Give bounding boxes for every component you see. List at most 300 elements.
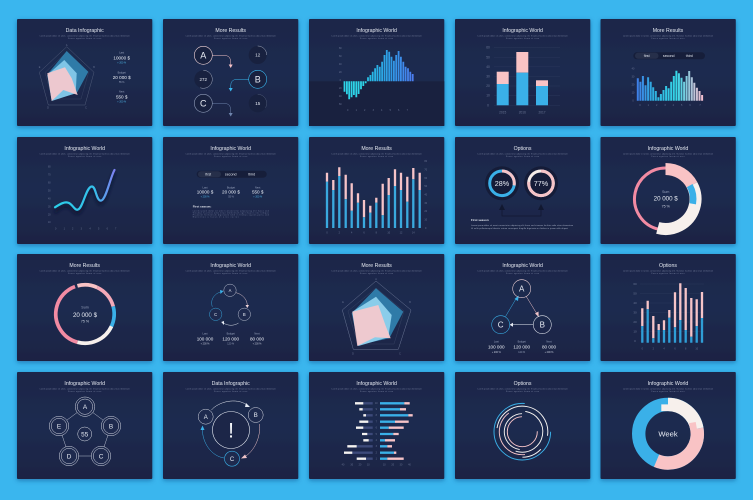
left dark bars	[352, 403, 373, 459]
x axis: 14	[412, 232, 415, 234]
x axis: 4	[89, 228, 91, 230]
description: Lorem ipsum dolor sit amet, consectetur adipiscing elit. Vivamus facilisis odio vitae elementum	[332, 34, 422, 38]
panel: tabs with stats	[163, 137, 298, 244]
card	[455, 19, 590, 126]
description: Fusce egestas lorem ut arcu	[214, 272, 247, 275]
card	[17, 19, 152, 126]
x axis	[642, 348, 699, 350]
y axis: 0	[632, 100, 634, 102]
y axis: 0	[487, 103, 489, 107]
x axis: 2	[72, 228, 74, 230]
stats	[113, 50, 131, 104]
first season text	[193, 205, 269, 218]
heading: Infographic World	[210, 146, 251, 152]
triangle diagram: C	[498, 321, 504, 330]
y axis: 40	[424, 194, 428, 196]
description: Lorem ipsum dolor sit amet, consectetur adipiscing elit. Vivamus facilisis odio vitae elementum	[623, 388, 714, 390]
description: Fusce egestas lorem ut arcu	[360, 390, 393, 393]
ring centre text: 20 000 $	[73, 312, 98, 319]
x axis: 6	[398, 109, 400, 112]
y axis: 20	[48, 214, 51, 216]
description: Fusce egestas lorem ut arcu	[214, 155, 247, 158]
y axis: 20	[424, 210, 428, 213]
card	[163, 254, 298, 361]
description: Fusce egestas lorem ut arcu	[652, 390, 685, 393]
first season text: Lorem ipsum dolor sit amet consectetur adipiscing elit fusce sed	[193, 210, 269, 212]
x axis: 30	[400, 463, 403, 466]
stats: 120 %	[227, 342, 235, 346]
y axis: 30	[48, 206, 51, 208]
description	[478, 34, 568, 40]
panel: butterfly bars	[309, 372, 444, 479]
y axis: 20	[339, 71, 342, 74]
description: Lorem ipsum dolor sit amet, consectetur adipiscing elit. Vivamus facilisis odio vitae elementum	[40, 34, 130, 38]
row labels: 4	[376, 439, 378, 442]
card	[163, 372, 298, 479]
x axis: 1	[64, 228, 66, 230]
x axis: 5	[98, 228, 100, 230]
stats: Budget	[227, 332, 235, 336]
description: Fusce egestas lorem ut arcu	[68, 155, 101, 158]
heading: More Results	[653, 28, 684, 34]
card	[600, 137, 736, 244]
x axis: 2	[653, 348, 655, 350]
x axis: 3	[373, 109, 375, 112]
row labels: 8	[376, 414, 378, 417]
heading: Options	[514, 381, 532, 387]
x axis: 4	[673, 104, 675, 107]
ring centre text	[73, 306, 98, 324]
x axis: 10	[367, 463, 370, 466]
x axis: 3	[664, 104, 666, 107]
left white bars	[344, 403, 369, 459]
panel: radar data infographic	[17, 19, 152, 126]
y axis	[48, 166, 51, 224]
y axis: 80	[424, 160, 428, 163]
description: Lorem ipsum dolor sit amet, consectetur adipiscing elit. Vivamus facilisis odio vitae elementum	[478, 152, 568, 156]
y axis	[633, 282, 637, 343]
node A with arrow: A	[200, 51, 206, 61]
stats: 120 %	[518, 351, 526, 354]
stats: Budget	[118, 70, 126, 74]
cycle diagram: B	[254, 413, 258, 419]
description: Lorem ipsum dolor sit amet, consectetur adipiscing elit. Vivamus facilisis odio vitae elementum	[186, 34, 276, 38]
ring centre text: 20 000 $	[654, 196, 678, 203]
y axis: 10	[424, 219, 428, 222]
x axis: 2016	[519, 110, 526, 114]
y axis: 60	[339, 55, 342, 58]
y axis: 20	[633, 320, 637, 324]
description	[332, 152, 422, 158]
x axis: 2017	[538, 110, 546, 114]
description: Fusce egestas lorem ut arcu	[652, 272, 685, 275]
stats: Last	[203, 332, 208, 336]
first season text: Maecenas a lacus et arcu varius	[193, 216, 239, 218]
ring centre text: 75 %	[662, 204, 671, 208]
node diagram: E	[57, 423, 61, 430]
heading: More Results	[361, 146, 392, 152]
x axis: 10	[695, 348, 699, 350]
x axis: 2	[656, 104, 658, 107]
description: Lorem ipsum dolor sit amet, consectetur adipiscing elit. Vivamus facilisis odio vitae elementum	[623, 34, 714, 38]
y axis: 50	[48, 190, 51, 192]
heading: Infographic World	[64, 381, 105, 387]
description: Fusce egestas lorem ut arcu	[652, 37, 685, 40]
node diagram	[49, 397, 121, 466]
node diagram: B	[109, 423, 113, 430]
panel: tabbed bars	[600, 19, 736, 126]
stats: + 200 %	[201, 342, 210, 346]
radar chart: C	[85, 106, 87, 110]
heading: Options	[659, 263, 677, 269]
tabs: second	[225, 173, 236, 177]
cycle diagram: B	[243, 312, 246, 317]
stats: Next	[255, 185, 261, 189]
panel: stacked column chart	[455, 19, 590, 126]
description	[40, 388, 130, 393]
concentric arcs	[486, 396, 558, 468]
description	[332, 270, 422, 275]
right pink bars	[385, 403, 413, 459]
lower dark band	[309, 81, 444, 126]
description: Fusce egestas lorem ut arcu	[214, 37, 247, 40]
heading: More Results	[361, 263, 392, 269]
node 15: 15	[255, 101, 261, 106]
x axis: 7	[115, 228, 117, 230]
x axis: 5	[681, 104, 683, 107]
tabs: third	[686, 54, 693, 58]
stats: 20 000 $	[222, 190, 240, 195]
line	[55, 170, 114, 210]
node B with arrow: B	[255, 75, 261, 85]
stats: + 200 %	[492, 351, 502, 354]
donut label: Week	[658, 430, 678, 439]
stats: 550 $	[252, 190, 264, 195]
row labels: 2	[376, 452, 378, 455]
cycle diagram: C	[230, 457, 235, 463]
description: Fusce egestas lorem ut arcu	[214, 390, 247, 393]
first season text: Vivamus facilisis odio vitae elementum eget mauris nec tempus	[193, 212, 269, 214]
first season text	[471, 218, 574, 230]
x axis	[639, 104, 701, 107]
stats: Next	[546, 340, 552, 344]
x axis: 0	[347, 109, 349, 112]
description	[186, 152, 276, 158]
panel: cycle of three	[163, 254, 298, 361]
cycle diagram: A	[204, 415, 208, 421]
card	[309, 137, 444, 244]
stats: + 200 %	[201, 196, 210, 198]
y axis: 10	[632, 92, 635, 94]
negative bars	[344, 81, 366, 99]
y axis	[424, 160, 428, 230]
y axis: 40	[633, 301, 637, 305]
stats: 120 000	[222, 336, 239, 341]
x axis: 30	[350, 463, 354, 466]
x axis: 5	[390, 109, 392, 112]
tabs	[197, 171, 267, 178]
description: Lorem ipsum dolor sit amet, consectetur adipiscing elit. Vivamus facilisis odio vitae elementum	[40, 388, 130, 390]
x axis	[326, 232, 415, 234]
stats	[197, 185, 264, 198]
stats: 55 %	[228, 196, 235, 198]
radar chart	[39, 44, 95, 110]
heading: Infographic World	[64, 146, 105, 152]
cycle diagram: C	[214, 312, 217, 317]
description: Fusce egestas lorem ut arcu	[652, 155, 685, 158]
blue bars	[327, 176, 420, 228]
x axis: 6	[689, 104, 691, 107]
bars	[638, 71, 702, 101]
panel: large radar	[309, 254, 444, 361]
x axis: 10	[387, 232, 391, 234]
y axis: 0	[634, 339, 636, 343]
node diagram: C	[99, 453, 104, 460]
x axis: 0	[326, 232, 328, 234]
row labels: 9	[376, 408, 378, 411]
triangle diagram	[492, 280, 551, 334]
donut chart	[634, 400, 702, 468]
blue bars	[642, 309, 702, 343]
heading: More Results	[69, 263, 100, 269]
pink bar tops	[327, 167, 420, 217]
line shadow	[55, 173, 114, 213]
x axis: 1	[356, 109, 358, 112]
stats: 120 000	[513, 344, 530, 350]
tabs	[633, 52, 705, 59]
radar chart: E	[39, 66, 41, 69]
stats: 20 000 $	[113, 75, 131, 80]
description	[623, 34, 714, 40]
x axis: 40	[408, 463, 411, 466]
description	[40, 34, 130, 40]
y axis: 60	[48, 182, 51, 184]
stats: Next	[254, 332, 260, 336]
description	[332, 388, 422, 393]
heading: Options	[514, 146, 532, 152]
x axis	[499, 110, 546, 114]
card	[455, 372, 590, 479]
tabs: second	[663, 54, 674, 58]
x axis: 1	[648, 104, 650, 107]
description: Lorem ipsum dolor sit amet, consectetur adipiscing elit. Vivamus facilisis odio vitae elementum	[623, 152, 714, 156]
description	[478, 388, 568, 393]
radar chart: D	[352, 352, 354, 356]
first season text: First season	[471, 218, 489, 222]
heading: Infographic World	[648, 146, 688, 152]
heading: Infographic World	[502, 28, 543, 34]
x axis	[55, 228, 117, 230]
card	[17, 137, 152, 244]
y axis: 20	[632, 84, 635, 86]
card	[163, 137, 298, 244]
ring centre text: Sum	[662, 190, 669, 194]
panel: percentage rings	[455, 137, 590, 244]
y axis: 60	[486, 46, 490, 50]
stats: 100 000	[488, 344, 505, 350]
description	[623, 270, 714, 275]
description: Lorem ipsum dolor sit amet, consectetur adipiscing elit. Vivamus facilisis odio vitae elementum	[186, 388, 276, 390]
node diagram: D	[67, 453, 72, 460]
x axis: 6	[674, 348, 676, 350]
y axis	[486, 46, 490, 107]
x axis: 2	[339, 232, 341, 234]
heading: Infographic World	[648, 381, 688, 387]
y axis: 30	[633, 310, 637, 314]
right blue bars	[380, 403, 408, 459]
y axis: 50	[633, 292, 637, 296]
y axis: 40	[48, 198, 51, 200]
x axis: 2015	[499, 110, 506, 114]
card	[455, 254, 590, 361]
y axis: 60	[424, 177, 428, 180]
panel: five nodes	[17, 372, 152, 479]
description: Lorem ipsum dolor sit amet, consectetur adipiscing elit. Vivamus facilisis odio vitae elementum	[478, 34, 568, 38]
radar chart: A	[66, 44, 68, 47]
description: Fusce egestas lorem ut arcu	[506, 272, 539, 275]
x axis: 7	[407, 109, 409, 112]
heading: Data Infographic	[212, 381, 250, 387]
y axis: 30	[424, 202, 428, 205]
heading: Infographic World	[210, 263, 251, 269]
triangle diagram: B	[540, 321, 545, 330]
tabs: third	[248, 173, 255, 177]
ring 77%: 77%	[534, 179, 549, 188]
stats: + 200 %	[253, 196, 263, 198]
row labels: 1	[376, 458, 378, 461]
y axis: 50	[424, 185, 428, 188]
description: Lorem ipsum dolor sit amet, consectetur adipiscing elit. Vivamus facilisis odio vitae elementum	[478, 270, 568, 272]
ring centre text	[654, 190, 678, 208]
heading: More Results	[215, 28, 246, 34]
card	[17, 254, 152, 361]
positive bars	[368, 50, 413, 81]
stats: Budget	[227, 185, 235, 189]
y axis: 70	[424, 168, 428, 171]
description: Fusce egestas lorem ut arcu	[68, 390, 101, 393]
description: Lorem ipsum dolor sit amet, consectetur adipiscing elit. Vivamus facilisis odio vitae elementum	[186, 152, 276, 156]
heading: Data Infographic	[66, 28, 104, 34]
x axis: 8	[376, 232, 378, 234]
cycle diagram	[210, 284, 250, 325]
panel: stacked thin bars	[309, 137, 444, 244]
panel: stacked columns	[600, 254, 736, 361]
description: Fusce egestas lorem ut arcu	[68, 37, 101, 40]
x axis: 4	[351, 232, 353, 234]
stats: 80 000	[542, 344, 556, 350]
y axis: 20	[339, 87, 342, 90]
stats: + 200 %	[545, 351, 554, 354]
heading: Infographic World	[356, 28, 397, 34]
y axis: 40	[486, 65, 490, 69]
node 12: 12	[255, 53, 261, 58]
x axis: 20	[359, 463, 362, 466]
x axis: 12	[400, 232, 403, 234]
description	[186, 34, 276, 40]
description: Lorem ipsum dolor sit amet, consectetur adipiscing elit. Vivamus facilisis odio vitae elementum	[332, 270, 422, 272]
x axis: 40	[342, 463, 345, 466]
description	[478, 152, 568, 158]
stats: Last	[494, 340, 499, 344]
panel: central alert cycle	[163, 372, 298, 479]
first season text: Ut nulla pellentesque lobortis rutrum consequat fringilla dignissim eu finibus in ipsum nibh aliquet	[471, 227, 568, 230]
radar chart	[342, 278, 411, 356]
card	[309, 254, 444, 361]
y axis: 40	[339, 95, 342, 98]
stats: Last	[203, 185, 208, 189]
stats: 55 %	[119, 81, 125, 84]
y axis: 0	[340, 79, 342, 82]
card	[455, 137, 590, 244]
y axis: 30	[486, 74, 490, 78]
row labels: 10	[375, 402, 378, 405]
first season text: Lorem ipsum dolor sit amet consectetur adipiscing elit fusce sed vivamus facilisis odio vitae elementum	[471, 224, 574, 227]
panel: concentric arcs	[455, 372, 590, 479]
description: Lorem ipsum dolor sit amet, consectetur adipiscing elit. Vivamus facilisis odio vitae elementum	[332, 388, 422, 390]
y axis	[339, 47, 342, 106]
radar chart: B	[93, 66, 95, 69]
description	[478, 270, 568, 275]
ring chart	[46, 275, 124, 353]
x axis: 0	[642, 348, 644, 350]
y axis: 80	[339, 47, 342, 50]
y axis: 10	[486, 94, 490, 98]
y axis: 10	[48, 221, 51, 224]
stats: 80 000	[250, 336, 264, 341]
y axis: 40	[632, 68, 635, 70]
y axis: 40	[339, 63, 342, 66]
description	[186, 270, 276, 275]
radar chart: E	[342, 301, 344, 304]
stats: + 200 %	[117, 61, 127, 64]
ring 28%: 28%	[495, 179, 510, 188]
x axis: 7	[699, 104, 701, 107]
radar chart: C	[399, 352, 401, 356]
ring chart	[625, 158, 706, 240]
x axis: 6	[363, 232, 365, 234]
description: Lorem ipsum dolor sit amet, consectetur adipiscing elit. Vivamus facilisis odio vitae elementum	[40, 152, 130, 156]
stats: + 200 %	[117, 100, 127, 104]
x axis: 6	[107, 228, 109, 230]
description: Fusce egestas lorem ut arcu	[360, 272, 393, 275]
stats: 550 $	[116, 95, 128, 100]
x axis: 0	[55, 228, 57, 230]
x axis: 2	[364, 109, 366, 112]
stats	[488, 340, 556, 354]
card	[309, 19, 444, 126]
x axis: 20	[391, 463, 395, 466]
tabs: first	[205, 173, 211, 177]
panel: week donut	[600, 372, 736, 479]
description	[623, 388, 714, 393]
description: Lorem ipsum dolor sit amet, consectetur adipiscing elit. Vivamus facilisis odio vitae elementum	[623, 270, 714, 272]
y axis: 70	[48, 174, 51, 176]
description: Fusce egestas lorem ut arcu	[360, 37, 393, 40]
row labels	[375, 402, 378, 461]
description	[40, 152, 130, 158]
description	[332, 34, 422, 40]
card	[600, 372, 736, 479]
y axis: 30	[632, 76, 635, 78]
panel: positive and negative bars	[309, 19, 444, 126]
stats: Budget	[518, 340, 526, 344]
description: Fusce egestas lorem ut arcu	[506, 37, 539, 40]
pink bar tops	[642, 283, 702, 338]
y axis: 60	[633, 282, 637, 286]
tabs: first	[644, 54, 650, 58]
radar chart: B	[409, 301, 411, 304]
stats	[197, 332, 264, 346]
